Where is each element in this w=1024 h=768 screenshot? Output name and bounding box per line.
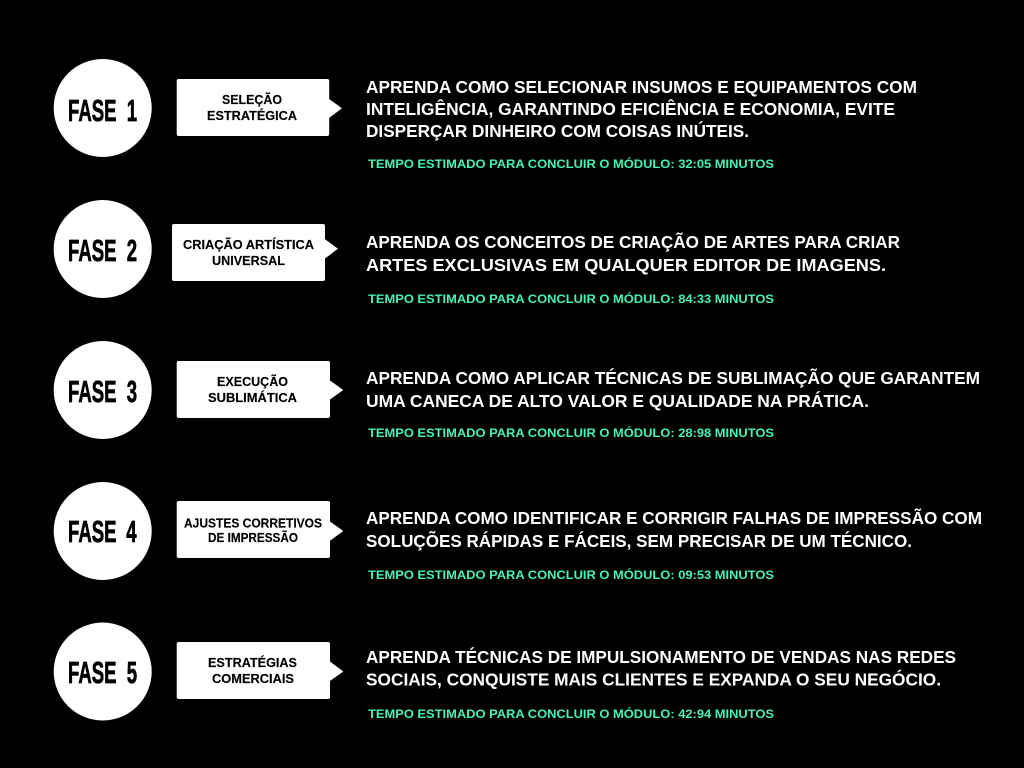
description: fase 1: INTELIGÊNCIA, GARANTINDO EFICIÊNCIA E ECONOMIA, EVITE [366,99,895,119]
badge: fase 1: FASE [68,94,117,128]
badge: fase 4: 4 [126,515,137,549]
panel: fase 5 [54,622,956,721]
label arrow box: seleção estratégica: SELEÇÃO [222,92,282,107]
description: fase 5: APRENDA TÉCNICAS DE IMPULSIONAMENTO DE VENDAS NAS REDES [366,647,956,667]
label arrow box: criação artística universal: CRIAÇÃO ARTÍSTICA [183,237,314,252]
badge: fase 2: FASE [68,234,117,268]
estimated time: fase 1: TEMPO ESTIMADO PARA CONCLUIR O MÓDULO: 32:05 MINUTOS [368,156,774,171]
label arrow box: estratégias comerciais: COMERCIAIS [212,671,294,686]
badge: fase 3 [54,341,152,439]
label arrow box: criação artística universal: UNIVERSAL [212,253,285,268]
badge: fase 3: FASE [68,375,117,409]
estimated time: fase 2: TEMPO ESTIMADO PARA CONCLUIR O MÓDULO: 84:33 MINUTOS [368,291,774,306]
description: fase 4 [366,508,982,551]
label arrow box: execução sublimática [177,361,343,418]
description: fase 1: DISPERÇAR DINHEIRO COM COISAS INÚTEIS. [366,121,749,141]
estimated time: fase 3: TEMPO ESTIMADO PARA CONCLUIR O MÓDULO: 28:98 MINUTOS [368,425,774,440]
panel: fase 1 [54,59,917,171]
description: fase 5: SOCIAIS, CONQUISTE MAIS CLIENTES E EXPANDA O SEU NEGÓCIO. [366,670,941,690]
description: fase 4: SOLUÇÕES RÁPIDAS E FÁCEIS, SEM PRECISAR DE UM TÉCNICO. [366,531,912,551]
badge: fase 2: 2 [127,234,137,268]
label arrow box: criação artística universal [172,224,338,281]
label arrow box: seleção estratégica [177,79,342,136]
description: fase 4: APRENDA COMO IDENTIFICAR E CORRIGIR FALHAS DE IMPRESSÃO COM [366,508,982,528]
badge: fase 3: 3 [127,375,137,409]
label arrow box: execução sublimática: SUBLIMÁTICA [208,390,297,405]
badge: fase 5: 5 [127,656,137,690]
badge: fase 4: FASE [68,515,117,549]
panel: fase 3 [54,341,980,440]
description: fase 2: ARTES EXCLUSIVAS EM QUALQUER EDITOR DE IMAGENS. [366,255,886,275]
label arrow box: ajustes corretivos de impressão [177,501,343,558]
badge: fase 1: 1 [127,94,137,128]
label arrow box: ajustes corretivos de impressão: DE IMPRESSÃO [208,530,298,545]
estimated time: fase 5: TEMPO ESTIMADO PARA CONCLUIR O MÓDULO: 42:94 MINUTOS [368,706,774,721]
badge: fase 5 [54,622,152,720]
description: fase 3: UMA CANECA DE ALTO VALOR E QUALIDADE NA PRÁTICA. [366,391,869,411]
panel: fase 2 [54,200,900,306]
label arrow box: estratégias comerciais [177,642,343,699]
label arrow box: estratégias comerciais: ESTRATÉGIAS [208,655,297,670]
description: fase 1: APRENDA COMO SELECIONAR INSUMOS E EQUIPAMENTOS COM [366,77,917,97]
description: fase 3: APRENDA COMO APLICAR TÉCNICAS DE SUBLIMAÇÃO QUE GARANTEM [366,368,980,388]
description: fase 2 [366,232,900,275]
description: fase 2: APRENDA OS CONCEITOS DE CRIAÇÃO DE ARTES PARA CRIAR [366,232,900,252]
label arrow box: execução sublimática: EXECUÇÃO [217,374,288,389]
badge: fase 1 [54,59,152,157]
badge: fase 5: FASE [68,656,117,690]
panel: fase 4 [54,482,982,582]
estimated time: fase 4: TEMPO ESTIMADO PARA CONCLUIR O MÓDULO: 09:53 MINUTOS [368,567,774,582]
badge: fase 4 [54,482,152,580]
label arrow box: seleção estratégica: ESTRATÉGICA [207,108,297,123]
description: fase 5 [366,647,956,690]
badge: fase 2 [54,200,152,298]
label arrow box: ajustes corretivos de impressão: AJUSTES CORRETIVOS [184,515,322,530]
description: fase 1 [366,77,917,141]
description: fase 3 [366,368,980,411]
